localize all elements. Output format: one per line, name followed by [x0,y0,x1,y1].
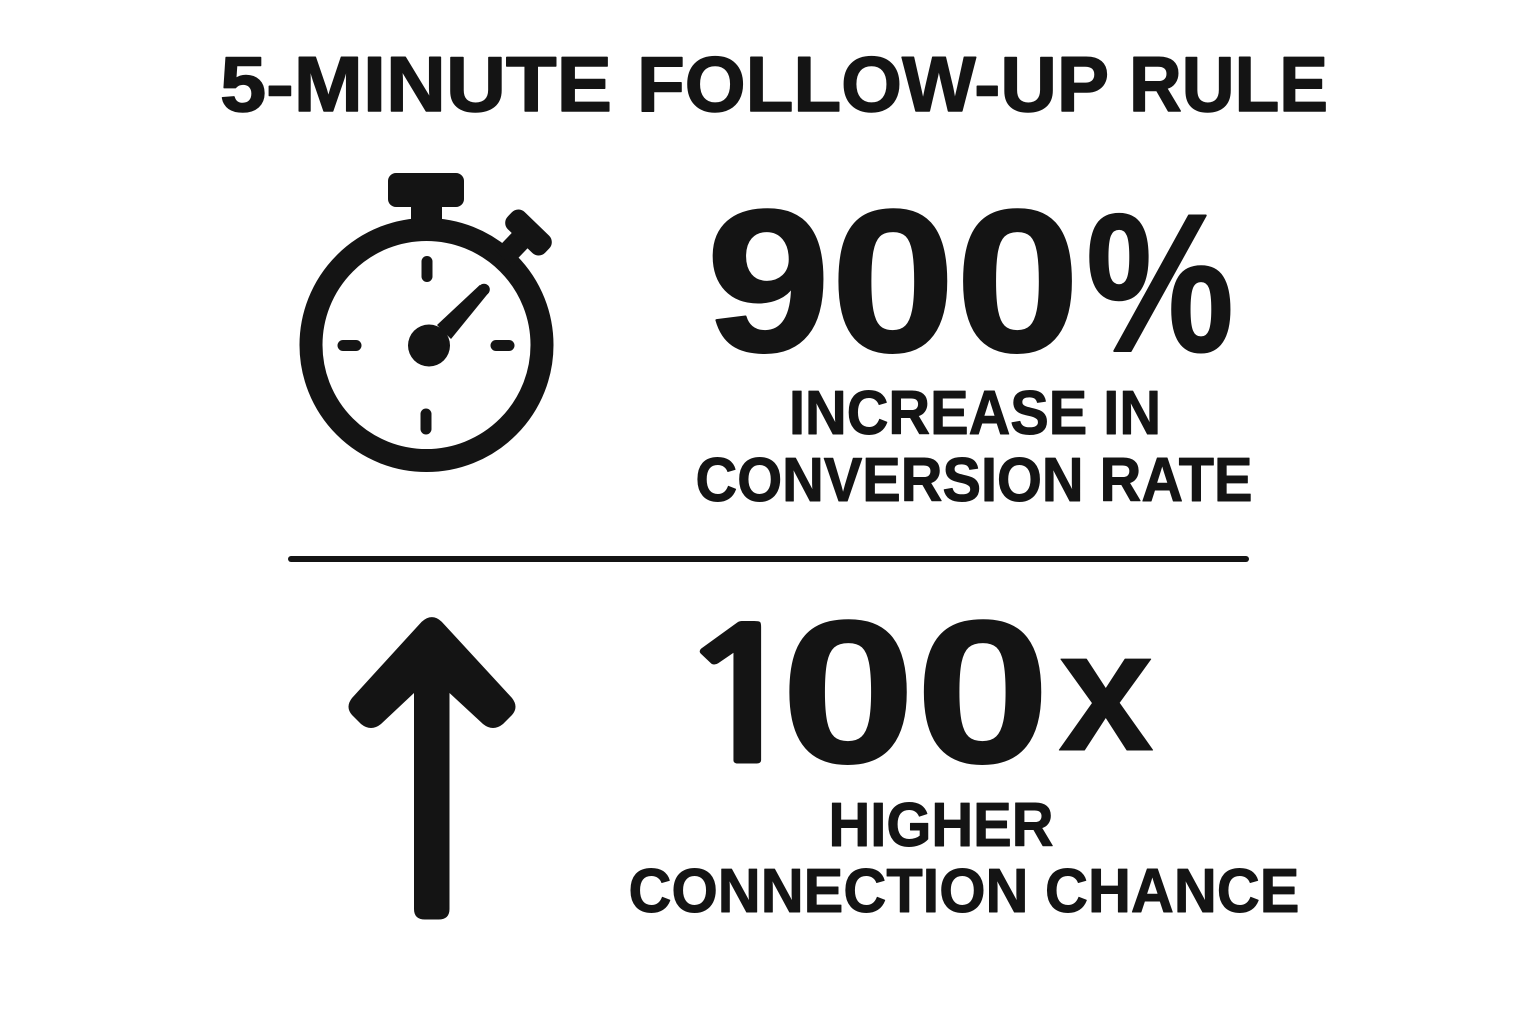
title: 5-MINUTE [220,40,612,128]
divider [291,556,1246,562]
stat: 100x: x [1058,595,1154,787]
stat: 900%: 900 [706,168,1080,395]
label: increase in conversion rate: INCREASE IN [789,379,1161,448]
label: higher connection chance [628,791,1300,926]
stat: 900% [706,168,1234,395]
label: higher connection chance: HIGHER [828,791,1054,860]
stat: 100x [671,579,1154,806]
stat: 100x: 1 [671,606,813,790]
stat: 900%: % [1086,173,1234,393]
title: RULE [1129,40,1328,128]
label: increase in conversion rate [696,379,1252,515]
title: FOLLOW-UP [637,40,1109,128]
title [220,40,1328,128]
icon: up arrow [348,617,516,920]
label: increase in conversion rate: CONVERSION RATE [696,446,1252,515]
icon: stopwatch [311,173,556,460]
stat: 100x: 00 [781,579,1050,806]
label: higher connection chance: CONNECTION CHANCE [628,857,1300,926]
